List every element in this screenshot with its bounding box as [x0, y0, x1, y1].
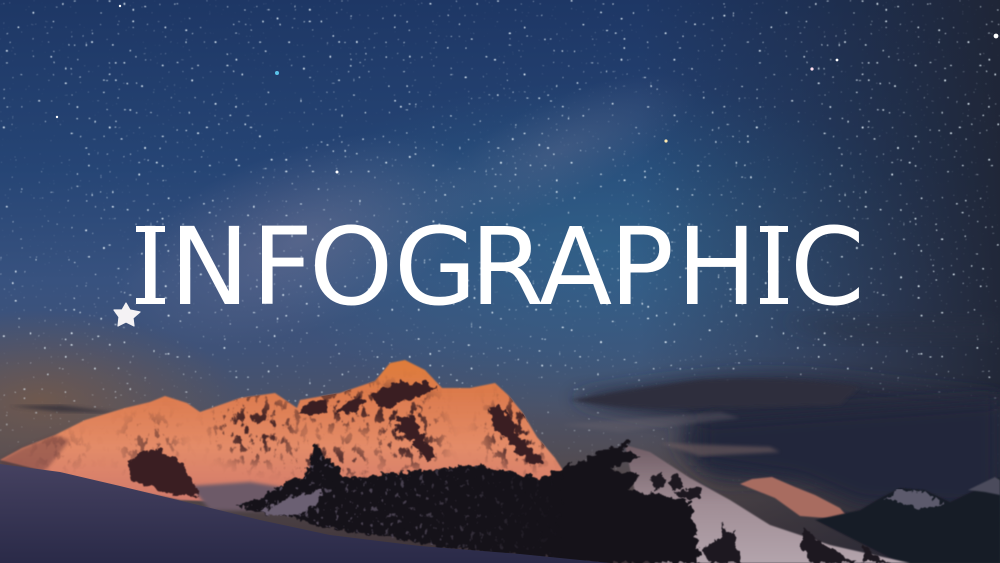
ridge snow specks: [240, 455, 538, 553]
icon: star: [114, 303, 140, 326]
rock texture: [32, 376, 548, 480]
sunlit mountain: [0, 355, 570, 512]
foreground snow hill: [0, 464, 610, 563]
left mountain shading: [0, 435, 70, 475]
dark tree ridge: [235, 440, 700, 563]
title: INFOGRAPHIC: [134, 206, 865, 330]
mountain rock faces: [128, 380, 546, 496]
valley shade: [190, 482, 300, 512]
right snow slope: [625, 445, 910, 563]
far hills: [740, 477, 1000, 563]
clouds: [10, 318, 1000, 510]
